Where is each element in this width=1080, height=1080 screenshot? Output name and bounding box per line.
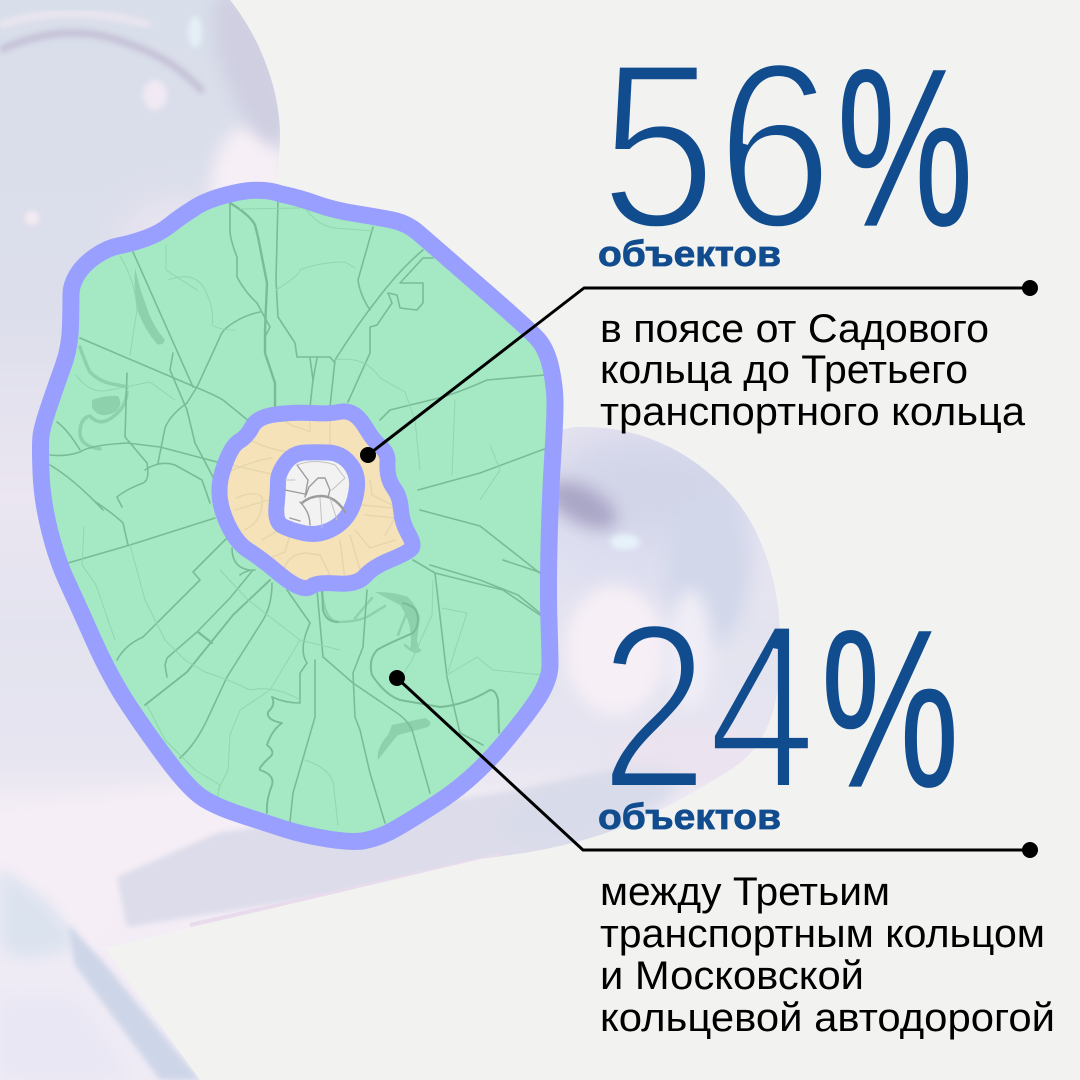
rivers — [80, 347, 420, 652]
label: objects 1: объектов — [598, 233, 781, 274]
lower left pink plane — [0, 785, 320, 950]
stat: 24%: % — [821, 584, 959, 834]
rings: Garden Ring with city centre — [276, 452, 357, 534]
zone: belt from Garden Ring to Third Ring — [219, 411, 413, 588]
stat: 24% — [612, 626, 954, 788]
callout leader: 24% — [389, 670, 1038, 858]
description 1: кольца до Третьего — [600, 348, 968, 392]
description 2: и Московской — [600, 954, 864, 998]
stat: 56% — [612, 65, 968, 227]
description 2: транспортным кольцом — [600, 912, 1045, 956]
rings: Third Ring Road — [219, 411, 413, 588]
zone: green belt between Third Ring and MKAD — [40, 190, 555, 841]
roads of the city centre — [285, 462, 345, 528]
roads inside the belt — [228, 412, 395, 580]
description 1: транспортного кольца — [600, 390, 1026, 434]
description 2: между Третьим — [600, 870, 890, 914]
label: objects 2: объектов — [598, 796, 781, 837]
callout leader: 56% — [360, 280, 1038, 463]
stat: 24%: 24 — [600, 575, 816, 839]
description 2: кольцевой автодорогой — [600, 996, 1055, 1040]
description 1 — [600, 307, 1026, 434]
stat: 56%: % — [837, 23, 973, 273]
rings: Moscow Ring Road — [40, 190, 555, 841]
map of Moscow — [40, 190, 555, 841]
water bodies — [92, 268, 430, 760]
right sphere details — [558, 524, 655, 576]
stat: 56%: 56 — [600, 14, 833, 278]
description 1: в поясе от Садового — [600, 307, 989, 351]
main roads — [50, 200, 547, 823]
description 2 — [600, 870, 1055, 1040]
minor roads — [76, 198, 543, 825]
background: pale glass spheres — [0, 0, 800, 1080]
